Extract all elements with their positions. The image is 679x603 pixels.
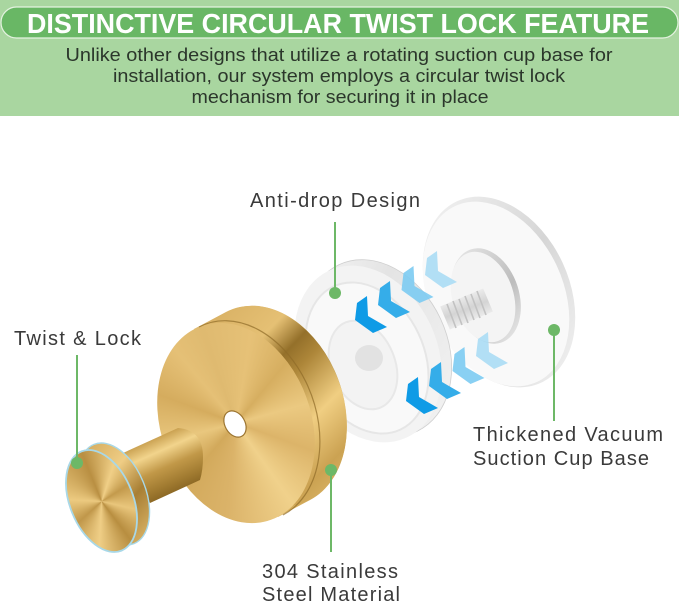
plate face	[130, 301, 342, 545]
callout: stainless steel	[262, 464, 400, 603]
plate groove	[199, 321, 320, 515]
hook back plate	[130, 284, 374, 545]
hook head	[52, 433, 163, 562]
callout: suction cup base: Thickened Vacuum	[473, 424, 663, 446]
callout: twist and lock: Twist & Lock	[14, 328, 142, 350]
description text: installation, our system employs a circular twist lock	[113, 65, 566, 86]
callout: twist and lock	[14, 328, 142, 469]
callout: anti-drop design	[250, 190, 420, 299]
callout: suction cup base	[473, 324, 663, 470]
plate rim	[194, 306, 347, 517]
title pill: DISTINCTIVE CIRCULAR TWIST LOCK FEATURE	[27, 8, 649, 39]
header band	[0, 0, 679, 116]
description text	[66, 44, 612, 107]
suction cup base	[393, 172, 605, 412]
callout: suction cup base: Suction Cup Base	[473, 448, 649, 470]
screw	[445, 291, 488, 328]
plate hole	[219, 407, 251, 441]
hook stem	[123, 428, 203, 503]
description text: mechanism for securing it in place	[192, 86, 488, 107]
anti-drop disc	[267, 235, 479, 467]
callout: stainless steel: 304 Stainless	[262, 561, 398, 583]
description text: Unlike other designs that utilize a rotating suction cup base for	[66, 44, 612, 65]
callout: anti-drop design: Anti-drop Design	[250, 190, 420, 212]
lower airflow chevrons	[406, 332, 508, 414]
upper airflow chevrons	[355, 251, 457, 333]
